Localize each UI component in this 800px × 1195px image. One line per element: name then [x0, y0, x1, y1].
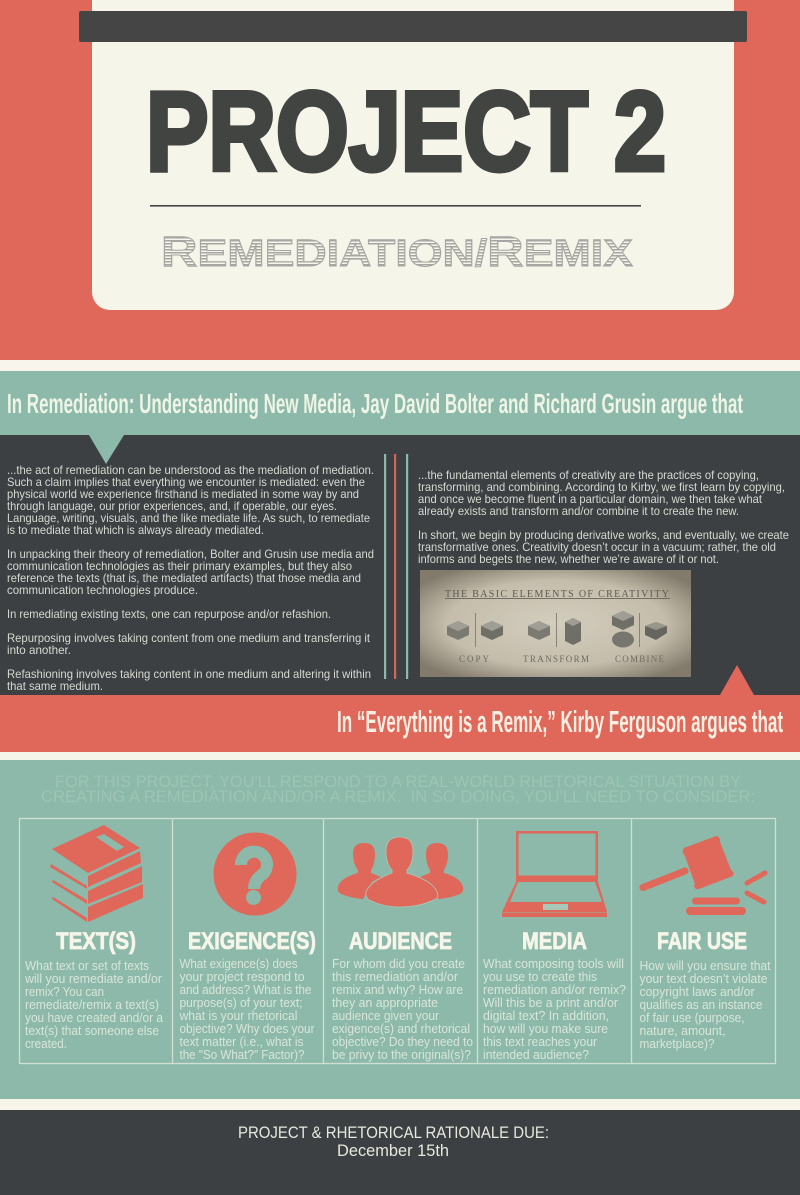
- right column text: transforming, and combining. According to Kirby, we first learn by copying,: [418, 481, 785, 494]
- icon: books: [50, 825, 143, 922]
- left column text: [7, 464, 374, 693]
- body: text matter (i.e., what is: [180, 1034, 304, 1049]
- right column text: already exists and transform and/or combine it to create the new.: [418, 505, 739, 518]
- icon: laptop: [502, 831, 607, 917]
- column: media: [483, 831, 626, 1062]
- body: [179, 956, 315, 1062]
- body: audience given your: [332, 1008, 440, 1023]
- right column text: and once we become fluent in a particular domain, we then take what: [418, 493, 763, 506]
- body: marketplace)?: [640, 1036, 714, 1051]
- body: What text or set of texts: [25, 958, 149, 973]
- banner: remix heading: [0, 665, 800, 752]
- due label: PROJECT & RHETORICAL RATIONALE DUE:: [238, 1124, 549, 1142]
- body: exigence(s) and rhetorical: [332, 1021, 470, 1036]
- body: text(s) that someone else: [25, 1023, 159, 1038]
- panel: title header: [0, 0, 800, 360]
- title: PROJECT 2: [146, 69, 666, 194]
- body: remediation and/or remix?: [483, 982, 626, 997]
- left column text: into another.: [7, 644, 71, 657]
- combine group: [612, 611, 667, 664]
- left column text: Language, writing, visuals, and the like mediate life. As such, to remediate: [7, 512, 370, 525]
- body: will you remediate and/or: [24, 971, 163, 986]
- body: what is your rhetorical: [179, 1008, 298, 1023]
- banner: remediation heading: [0, 371, 800, 464]
- heading: EXIGENCE(S): [188, 928, 316, 955]
- body: objective? Why does your: [180, 1021, 315, 1036]
- right column text: transformative ones. Creativity doesn’t occur in a vacuum; rather, the old: [418, 541, 776, 554]
- left column text: physical world we experience firsthand is mediated in some way by and: [7, 488, 359, 501]
- icon: question mark: [214, 832, 296, 916]
- combine group: COMBINE: [615, 654, 664, 664]
- cream separator band: [0, 752, 800, 760]
- body: For whom did you create: [332, 956, 465, 971]
- body: copyright laws and/or: [640, 984, 755, 999]
- body: this remediation and/or: [332, 969, 459, 984]
- column: audience: [332, 837, 473, 1062]
- body: What composing tools will: [483, 956, 624, 971]
- title rule: [150, 205, 641, 207]
- body: be privy to the original(s)?: [332, 1047, 471, 1062]
- red pointer: [720, 665, 754, 695]
- column: texts: [24, 825, 164, 1051]
- diagram: the basic elements of creativity: THE BASIC ELEMENTS OF CREATIVITY: [445, 589, 669, 600]
- body: your text doesn’t violate: [640, 971, 768, 986]
- body: qualifies as an instance: [640, 997, 762, 1012]
- left column text: communication technologies as their primary examples, but they also: [7, 560, 352, 573]
- body: you use to create this: [483, 969, 597, 984]
- heading: FAIR USE: [657, 928, 747, 955]
- title card: [92, 0, 734, 310]
- panel: footer due date: [0, 1110, 800, 1195]
- body: nature, amount,: [640, 1023, 726, 1038]
- body: How will you ensure that: [640, 958, 771, 973]
- body: of fair use (purpose,: [640, 1010, 744, 1025]
- left column text: is to mediate that which is always already mediated.: [7, 524, 264, 537]
- left column text: In unpacking their theory of remediation, Bolter and Grusin use media and: [7, 548, 374, 561]
- left column text: In remediating existing texts, one can repurpose and/or refashion.: [7, 608, 331, 621]
- body: and address? What is the: [180, 982, 312, 997]
- body: this text reaches your: [483, 1034, 598, 1049]
- heading: AUDIENCE: [349, 928, 452, 955]
- body: how will you make sure: [483, 1021, 608, 1036]
- body: created.: [25, 1036, 67, 1051]
- right column text: informs and begets the new, whether we’re aware of it or not.: [418, 553, 719, 566]
- grid frame: [20, 818, 776, 1064]
- body: the "So What?" Factor)?: [180, 1047, 304, 1062]
- teal pointer: [89, 435, 124, 464]
- body: digital text? In addition,: [483, 1008, 609, 1023]
- left column text: reference the texts (that is, the mediated artifacts) that those media and: [7, 572, 361, 585]
- panel: project considerations: [0, 760, 800, 1099]
- right column text: In short, we begin by producing derivative works, and eventually, we create: [418, 529, 789, 542]
- copy pair: [447, 613, 503, 664]
- body: you have created and/or a: [25, 1010, 164, 1025]
- subtitle: REMEDIATION/ REMIX: [161, 228, 634, 276]
- body: [483, 956, 626, 1062]
- left column text: Refashioning involves taking content in one medium and altering it within: [7, 668, 371, 681]
- column divider lines: [384, 454, 408, 679]
- body: objective? Do they need to: [332, 1034, 473, 1049]
- transform pair: TRANSFORM: [523, 654, 589, 664]
- left column text: ...the act of remediation can be understood as the mediation of mediation.: [7, 464, 374, 477]
- transform pair: [523, 613, 589, 664]
- body: Will this be a print and/or: [483, 995, 619, 1010]
- left column text: through language, our prior experiences, and, if operable, our eyes.: [7, 500, 337, 513]
- top dark bar: [79, 11, 747, 42]
- body: remediate/remix a text(s): [25, 997, 159, 1012]
- body: What exigence(s) does: [180, 956, 298, 971]
- left column text: Repurposing involves taking content from one medium and transferring it: [7, 632, 371, 645]
- left column text: Such a claim implies that everything we encounter is mediated: even the: [7, 476, 365, 489]
- diagram: the basic elements of creativity: [420, 570, 691, 677]
- due date: December 15th: [337, 1142, 449, 1160]
- body: purpose(s) of your text;: [180, 995, 302, 1010]
- right column text: ...the fundamental elements of creativity are the practices of copying,: [418, 469, 759, 482]
- intro text: FOR THIS PROJECT, YOU'LL RESPOND TO A REAL-WORLD RHETORICAL SITUATION BY: [55, 773, 741, 791]
- body: your project respond to: [180, 969, 304, 984]
- icon: gavel: [643, 836, 765, 915]
- column: fair use: [640, 836, 771, 1051]
- copy pair: COPY: [459, 654, 490, 664]
- body: [640, 958, 771, 1051]
- right column text: [418, 469, 789, 566]
- white separator band: [0, 360, 800, 371]
- body: intended audience?: [483, 1047, 589, 1062]
- column: exigence: [179, 832, 316, 1062]
- panel: dark explanation section: [0, 435, 800, 695]
- heading: TEXT(S): [56, 928, 136, 955]
- icon: people: [338, 837, 463, 907]
- body: remix and why? How are: [332, 982, 463, 997]
- left column text: communication technologies produce.: [7, 584, 198, 597]
- body: [24, 958, 164, 1051]
- cream separator band: [0, 1099, 800, 1110]
- intro text: [41, 773, 755, 806]
- body: [332, 956, 473, 1062]
- intro text: CREATING A REMEDIATION AND/OR A REMIX. IN SO DOING, YOU'LL NEED TO CONSIDER:: [41, 788, 755, 806]
- heading: MEDIA: [522, 928, 587, 955]
- body: they an appropriate: [332, 995, 438, 1010]
- body: remix? You can: [25, 984, 104, 999]
- left column text: that same medium.: [7, 680, 103, 693]
